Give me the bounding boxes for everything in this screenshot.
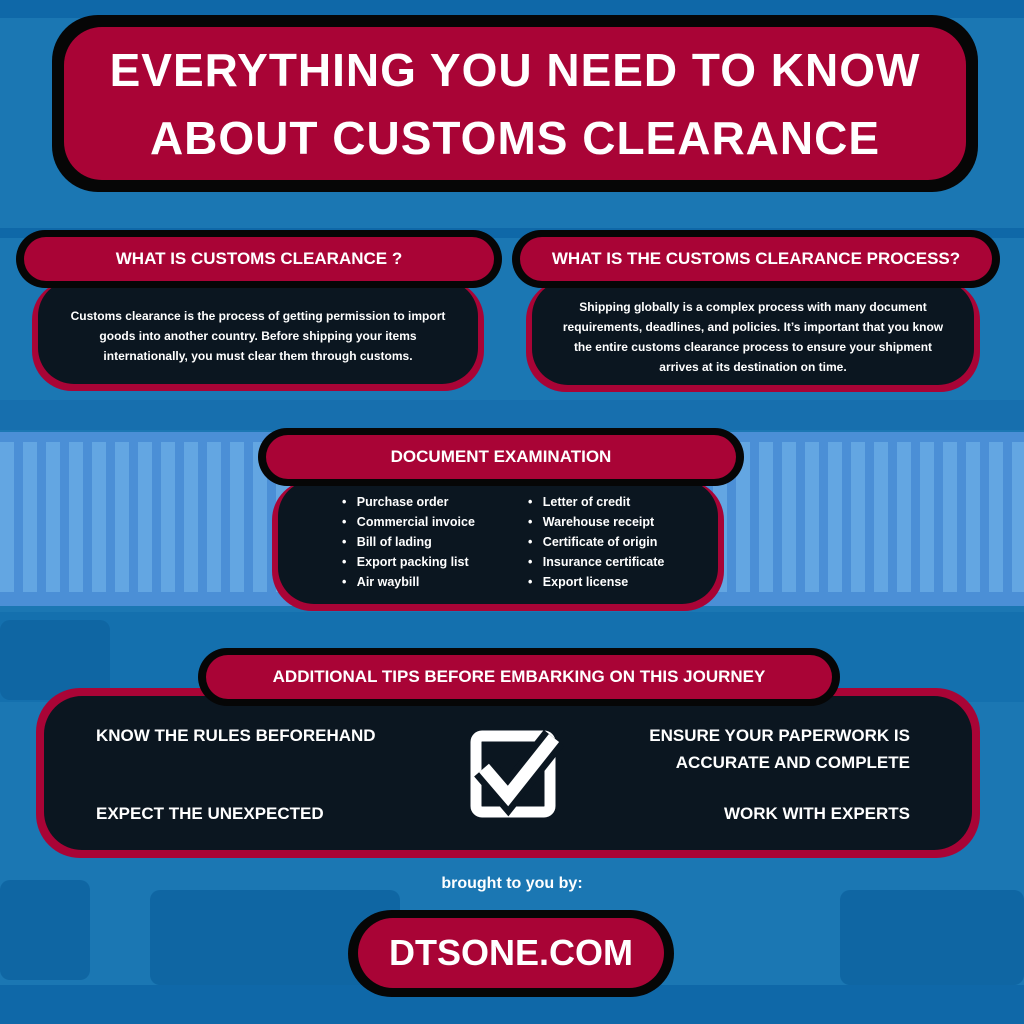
panel: what is customs clearance body: [32, 280, 484, 391]
title: EVERYTHING YOU NEED TO KNOW: [110, 44, 920, 96]
list right: • Certificate of origin: [528, 535, 657, 549]
list left: [342, 495, 475, 589]
list right: • Letter of credit: [528, 495, 630, 509]
tip 4: WORK WITH EXPERTS: [724, 804, 910, 823]
list right: • Warehouse receipt: [528, 515, 654, 529]
list left: • Commercial invoice: [342, 515, 475, 529]
panel: tips body: [36, 688, 980, 858]
panel header: document examination: DOCUMENT EXAMINATION: [391, 447, 611, 466]
tip 3: [649, 726, 910, 772]
logo button: dtsone.com: [348, 910, 674, 997]
panel header: process: WHAT IS THE CUSTOMS CLEARANCE PROCESS?: [552, 249, 960, 268]
panel header: what is customs clearance: WHAT IS CUSTOMS CLEARANCE ?: [116, 249, 402, 268]
tip 3: ACCURATE AND COMPLETE: [676, 753, 910, 772]
panel: process body: [526, 280, 980, 392]
shipping container band: [0, 432, 1024, 606]
tip 3: ENSURE YOUR PAPERWORK IS: [649, 726, 910, 745]
panel header: process: [512, 230, 1000, 288]
list left: • Bill of lading: [342, 535, 432, 549]
panel header: document examination: [258, 428, 744, 486]
panel header: tips: [198, 648, 840, 706]
list left: • Export packing list: [342, 555, 469, 569]
list right: • Export license: [528, 575, 628, 589]
title: [52, 15, 978, 192]
icon: checkbox: [470, 730, 559, 818]
panel: process body: Shipping globally is a complex process with many document requirements, deadlines, and policies. It’s important that you know the entire customs clearance process to ensure your shipment arrives at its destination on time.: [563, 300, 943, 374]
panel: what is customs clearance body: Customs clearance is the process of getting permission to import goods into another country. Before shipping your items internationally, you must clear them through customs.: [71, 309, 445, 363]
list right: • Insurance certificate: [528, 555, 664, 569]
logo button: dtsone.com: DTSONE.COM: [389, 932, 633, 973]
panel header: tips: ADDITIONAL TIPS BEFORE EMBARKING ON THIS JOURNEY: [273, 667, 765, 686]
list left: • Air waybill: [342, 575, 419, 589]
text: brought to you by: brought to you by:: [441, 875, 583, 892]
panel header: what is customs clearance: [16, 230, 502, 288]
title: ABOUT CUSTOMS CLEARANCE: [150, 112, 880, 164]
panel: document examination body: [272, 480, 724, 611]
list left: • Purchase order: [342, 495, 449, 509]
list right: [528, 495, 664, 589]
tip 1: KNOW THE RULES BEFOREHAND: [96, 726, 376, 745]
tip 2: EXPECT THE UNEXPECTED: [96, 804, 324, 823]
